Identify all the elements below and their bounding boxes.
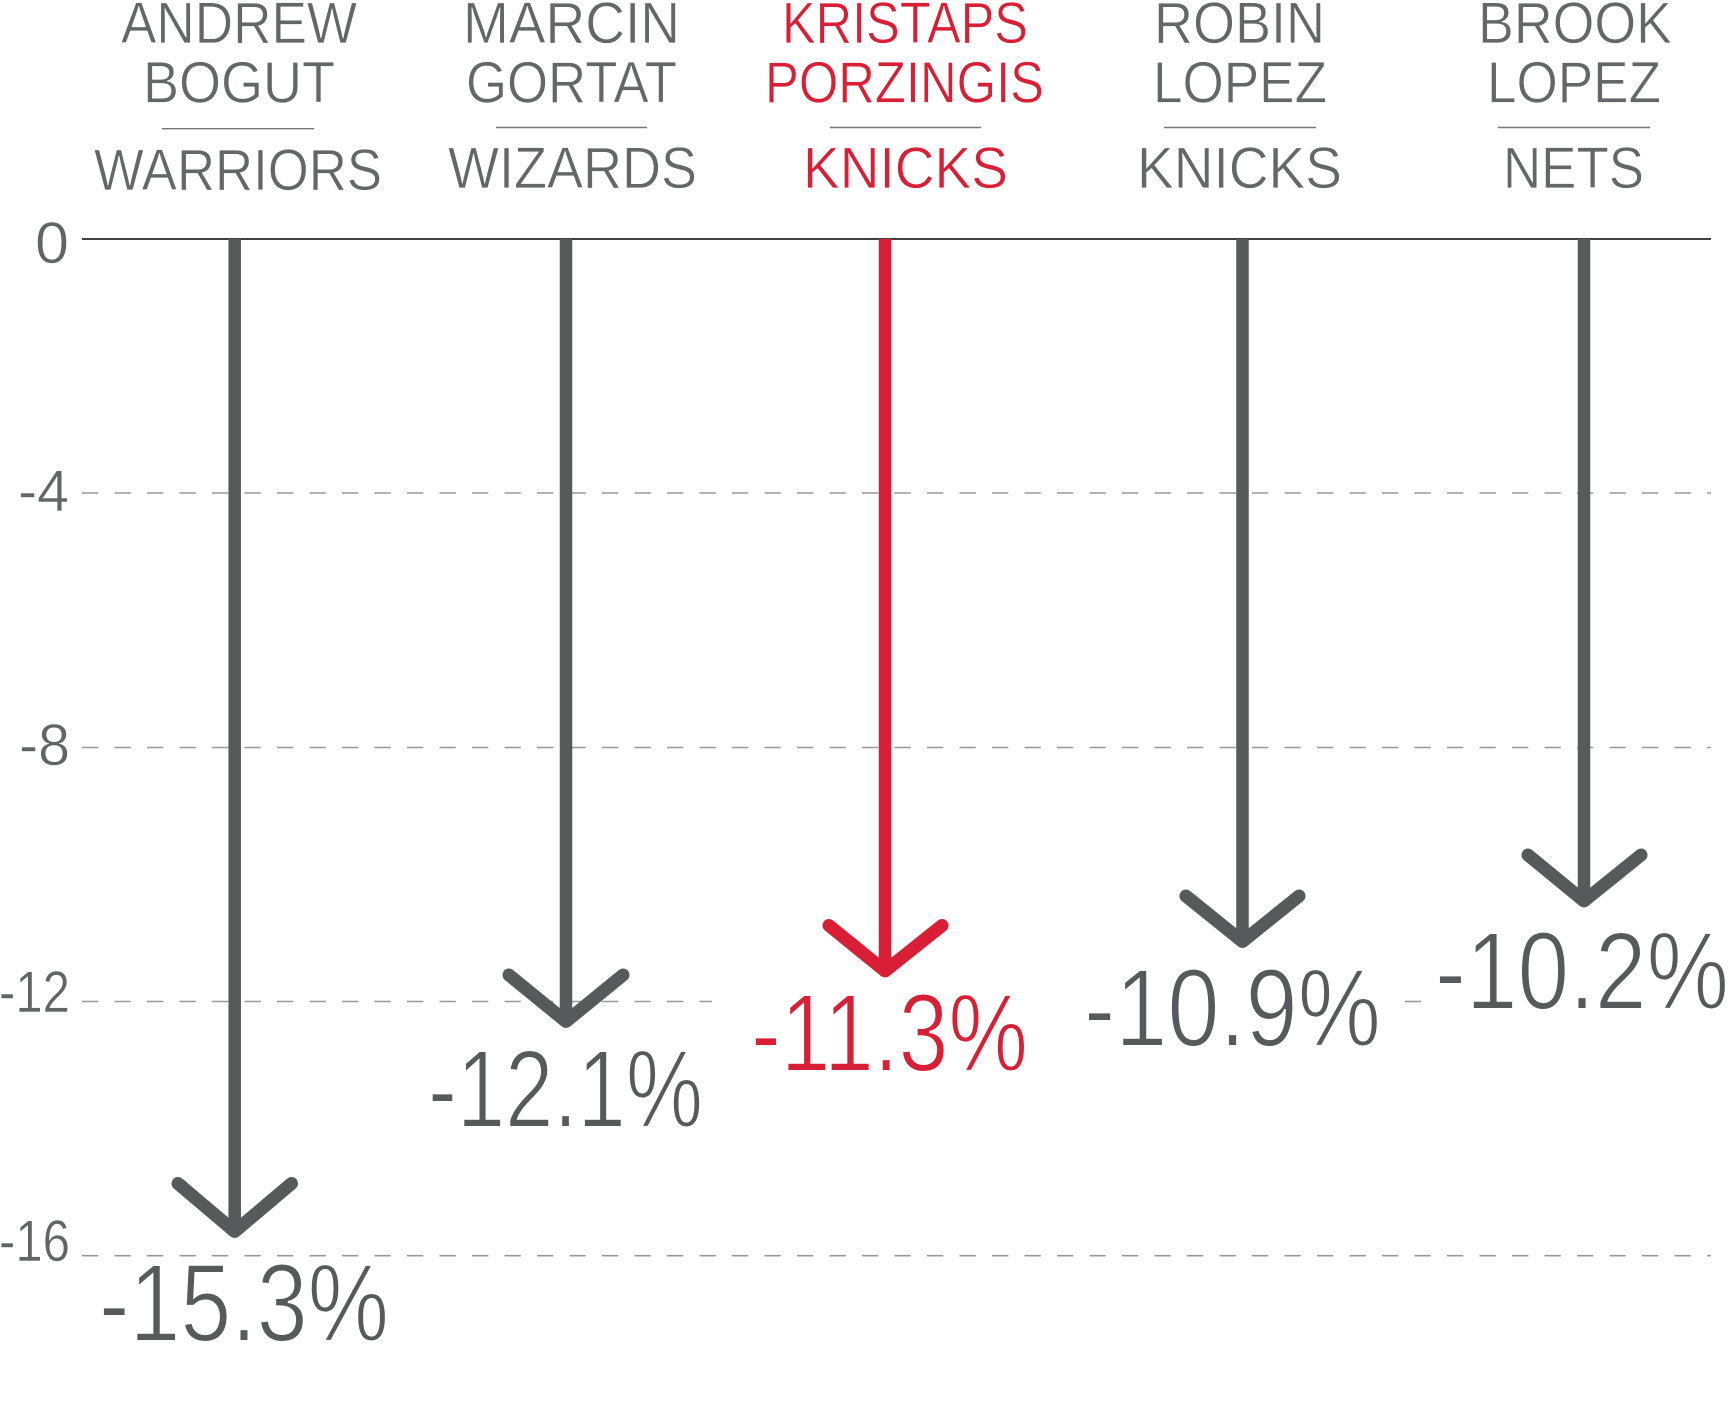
gridline -12 <box>82 1000 1421 1002</box>
divider <box>830 126 981 128</box>
team: NETS <box>1503 136 1644 201</box>
player name <box>121 0 357 116</box>
team: WARRIORS <box>94 138 382 203</box>
column: Marcin Gortat <box>428 0 703 1151</box>
axis labels: -12 <box>0 960 70 1025</box>
value: -11.3% <box>751 972 1028 1095</box>
player name <box>1153 0 1327 116</box>
arrow <box>178 239 292 1232</box>
axis labels: -16 <box>0 1209 70 1274</box>
gridline -4 <box>82 492 1711 494</box>
divider <box>496 126 647 128</box>
gridline -8 <box>82 746 1711 748</box>
value: -15.3% <box>99 1242 389 1365</box>
player name: GORTAT <box>466 50 677 116</box>
column: Andrew Bogut <box>94 0 389 1365</box>
player name: LOPEZ <box>1487 50 1661 116</box>
column: Brook Lopez <box>1435 0 1728 1033</box>
arrow <box>829 239 942 971</box>
player name <box>765 0 1044 116</box>
column: Robin Lopez <box>1084 0 1381 1070</box>
axis labels: -8 <box>19 713 70 778</box>
team: KNICKS <box>803 136 1008 201</box>
divider <box>162 128 314 130</box>
player name <box>1478 0 1672 116</box>
axis labels <box>0 211 70 1274</box>
zero baseline <box>82 238 1711 240</box>
column: Kristaps Porzingis <box>751 0 1044 1095</box>
value: -10.9% <box>1084 947 1381 1070</box>
gridline -16 <box>82 1255 1711 1257</box>
axis labels: 0 <box>35 211 69 276</box>
team: KNICKS <box>1137 136 1342 201</box>
arrow <box>1528 239 1641 901</box>
player name: BOGUT <box>143 50 335 116</box>
player name: PORZINGIS <box>765 50 1044 116</box>
arrow <box>509 239 623 1022</box>
arrow <box>1186 239 1299 942</box>
player name: LOPEZ <box>1153 50 1327 116</box>
value: -12.1% <box>428 1028 703 1151</box>
team: WIZARDS <box>448 136 697 201</box>
divider <box>1164 126 1316 128</box>
player name <box>463 0 680 116</box>
axis labels: -4 <box>18 459 69 524</box>
divider <box>1498 126 1650 128</box>
